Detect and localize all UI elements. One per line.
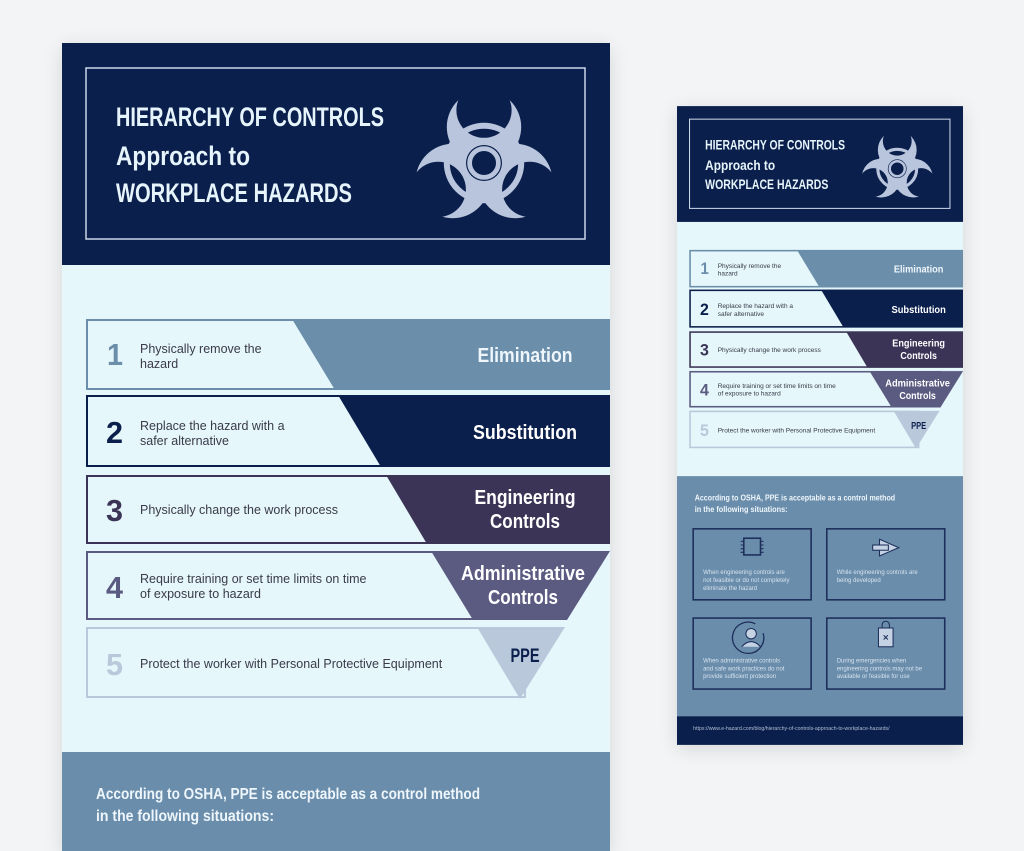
panel: OSHA situations: eliminate the hazard bbox=[703, 586, 757, 592]
row 5 ppe: PPE bbox=[510, 646, 540, 667]
panel: hierarchy rows: safer alternative bbox=[718, 311, 764, 318]
row 3 engineering controls bbox=[87, 475, 610, 544]
row 3 engineering controls: Engineering bbox=[474, 487, 576, 509]
card: large infographic bbox=[62, 43, 610, 851]
panel: hierarchy rows: Physically change the work process bbox=[718, 347, 822, 354]
footer: https://www.e-hazard.com/blog/hierarchy-of-controls-approach-to-workplace-hazards/ bbox=[693, 726, 890, 732]
footer bbox=[677, 716, 963, 745]
panel: OSHA situations: According to OSHA, PPE is acceptable as a control method bbox=[695, 493, 895, 503]
panel: OSHA situations bbox=[677, 476, 963, 716]
row 2 substitution: Replace the hazard with a bbox=[140, 419, 285, 433]
row 5 ppe: Protect the worker with Personal Protective Equipment bbox=[140, 657, 443, 671]
row 2 substitution: Substitution bbox=[473, 422, 577, 444]
panel: hierarchy rows: Require training or set time limits on time bbox=[718, 383, 836, 390]
row 4 administrative controls bbox=[87, 551, 611, 621]
row 1 elimination: 1 bbox=[107, 337, 123, 372]
panel: hierarchy rows: Physically remove the bbox=[718, 263, 781, 270]
panel: hierarchy rows: Protect the worker with Personal Protective Equipment bbox=[718, 427, 875, 434]
panel: hierarchy rows: Substitution bbox=[892, 305, 946, 316]
card: small full infographic bbox=[677, 106, 963, 745]
panel: hierarchy rows: Controls bbox=[899, 391, 936, 402]
row 1 elimination: Physically remove the bbox=[140, 342, 262, 356]
header band bbox=[62, 43, 610, 265]
panel: hierarchy rows: Engineering bbox=[892, 339, 945, 350]
row 3 engineering controls: 3 bbox=[106, 493, 123, 528]
panel: hierarchy rows: Elimination bbox=[894, 265, 943, 276]
panel: OSHA situations: engineering controls may not be bbox=[837, 666, 923, 672]
panel: OSHA situations: and safe work practices do not bbox=[703, 666, 785, 672]
panel: hierarchy rows: PPE bbox=[911, 421, 927, 432]
title: WORKPLACE HAZARDS bbox=[116, 178, 352, 208]
row 5 ppe bbox=[87, 627, 565, 699]
row 4 administrative controls: 4 bbox=[106, 570, 124, 605]
heading: osha: in the following situations: bbox=[96, 808, 274, 825]
panel: hierarchy rows bbox=[677, 222, 964, 476]
icon: biohazard bbox=[416, 100, 552, 218]
panel: OSHA situations: in the following situations: bbox=[695, 504, 788, 514]
panel: hierarchy rows: 4 bbox=[700, 382, 709, 400]
panel: hierarchy rows: 1 bbox=[700, 260, 709, 278]
panel: hierarchy rows: Replace the hazard with a bbox=[718, 303, 793, 310]
panel: hierarchy rows: 2 bbox=[700, 301, 709, 319]
title: HIERARCHY OF CONTROLS bbox=[116, 102, 384, 132]
title: HIERARCHY OF CONTROLS bbox=[705, 136, 845, 152]
panel: hierarchy rows: hazard bbox=[718, 271, 738, 278]
row 3 engineering controls: Physically change the work process bbox=[140, 503, 338, 517]
row 4 administrative controls: Controls bbox=[488, 587, 558, 609]
row 5 ppe: 5 bbox=[106, 647, 123, 682]
row 4 administrative controls: Administrative bbox=[461, 563, 585, 585]
panel: OSHA situations: not feasible or do not completely bbox=[703, 578, 789, 584]
row 1 elimination: Elimination bbox=[478, 345, 572, 367]
title: Approach to bbox=[116, 141, 250, 171]
row 3 engineering controls: Controls bbox=[490, 511, 560, 533]
panel: OSHA situations: When administrative controls bbox=[703, 658, 780, 664]
panel: hierarchy rows bbox=[62, 265, 611, 752]
panel: hierarchy rows: 5 bbox=[700, 422, 709, 440]
header band bbox=[677, 106, 963, 222]
panel: OSHA situations: provide sufficient protection bbox=[703, 674, 776, 680]
row 1 elimination: hazard bbox=[140, 357, 178, 371]
panel: hierarchy rows: Controls bbox=[900, 351, 937, 362]
row 2 substitution: 2 bbox=[106, 415, 123, 450]
panel: OSHA situations bbox=[62, 752, 610, 851]
panel: OSHA situations: available or feasible for use bbox=[837, 674, 910, 680]
row 2 substitution bbox=[87, 395, 610, 467]
panel: hierarchy rows: Administrative bbox=[885, 378, 950, 389]
panel: hierarchy rows: of exposure to hazard bbox=[718, 391, 781, 398]
panel: OSHA situations: During emergencies when bbox=[837, 658, 906, 664]
row 4 administrative controls: of exposure to hazard bbox=[140, 587, 261, 601]
panel: hierarchy rows: 3 bbox=[700, 342, 709, 360]
panel: OSHA situations: While engineering controls are bbox=[837, 570, 918, 576]
heading: osha bbox=[96, 786, 480, 825]
title: WORKPLACE HAZARDS bbox=[705, 176, 828, 192]
row 4 administrative controls: Require training or set time limits on time bbox=[140, 572, 367, 586]
title bbox=[705, 136, 845, 192]
title: Approach to bbox=[705, 157, 775, 173]
panel: OSHA situations: When engineering controls are bbox=[703, 570, 785, 576]
title bbox=[116, 102, 384, 208]
icon: biohazard bbox=[862, 136, 932, 198]
panel: OSHA situations: being developed bbox=[837, 578, 881, 584]
heading: osha: According to OSHA, PPE is acceptable as a control method bbox=[96, 786, 480, 803]
row 1 elimination bbox=[87, 319, 610, 390]
row 2 substitution: safer alternative bbox=[140, 434, 229, 448]
